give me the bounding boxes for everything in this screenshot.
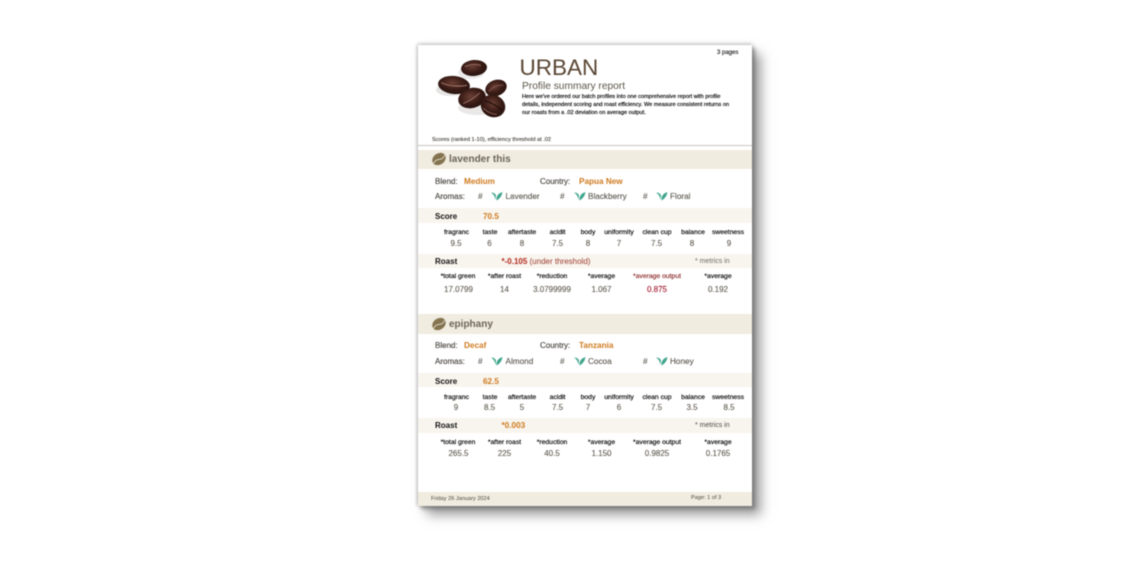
roast band [418,254,752,268]
panel: epiphany: 8.5 [484,402,495,412]
panel: lavender this: 0.192 [708,284,728,294]
panel: lavender this: aftertaste [508,229,536,236]
icon: leaf [490,356,503,366]
panel: lavender this: 8 [690,239,694,248]
aromas: Aromas: [435,357,465,366]
panel: lavender this: 1.067 [591,284,612,294]
panel: lavender this: Score [435,212,457,220]
panel: lavender this: Papua New [579,176,623,186]
panel: epiphany: acidit [550,394,565,400]
panel: epiphany: 3.5 [686,402,698,412]
panel: lavender this: 14 [500,284,509,294]
panel: lavender this: 7.5 [651,239,662,248]
panel: lavender this: 7 [617,239,621,248]
panel: lavender this: Floral [670,192,690,200]
panel: lavender this: Roast [435,256,457,266]
panel: epiphany: 265.5 [448,448,469,458]
date: Friday 26 January 2024 [431,496,490,502]
roast metrics: *total green [441,438,475,446]
score metrics: fragranc [444,394,469,400]
panel: epiphany: Score [435,376,457,386]
intro text [521,93,730,116]
panel: epiphany: taste [483,394,497,400]
panel: lavender this: 17.0799 [444,284,473,294]
scale note: Scores (ranked 1-10), efficiency threshold at .02 [432,137,551,143]
panel: lavender this: * metrics in [695,258,730,264]
panel: epiphany: 6 [617,402,621,412]
panel: epiphany: sweetness [712,394,744,400]
panel: epiphany: 7 [586,402,590,412]
panel: lavender this: body [581,229,595,236]
panel: lavender this: *average [588,273,615,280]
title: URBAN [520,55,598,80]
roast band [418,418,752,433]
intro text: details, independent scoring and roast efficiency. We measure consistent returns on [522,102,729,108]
subtitle: Profile summary report [522,81,625,92]
panel: epiphany: Almond [506,357,533,366]
panel: epiphany: * metrics in [695,422,730,428]
country: Country: [540,177,570,186]
panel: epiphany: *average output [633,438,681,446]
panel: epiphany: body [581,394,595,400]
icon: leaf [490,192,503,201]
panel: lavender this: 3.0799999 [533,284,571,294]
panel: lavender this: *after roast [488,273,521,280]
panel: epiphany: 1.150 [591,448,612,458]
panel: lavender this [418,150,752,294]
panel: lavender this: 8 [586,239,590,248]
score band [418,373,752,387]
panel: epiphany: 7.5 [651,402,662,412]
icon: leaf [574,356,586,366]
roast metrics: *total green [441,273,475,280]
panel: lavender this: 6 [487,239,492,248]
divider [418,145,752,146]
panel: lavender this: *average output [633,273,681,280]
panel: epiphany [418,314,752,458]
panel: epiphany: *average [704,438,732,446]
panel: lavender this: 9 [727,239,731,248]
panel: epiphany: clean cup [642,394,672,400]
panel: lavender this: uniformity [604,229,634,236]
panel: epiphany: 5 [520,402,524,412]
panel: lavender this: 8 [520,239,524,248]
panel: epiphany: 7.5 [552,402,563,412]
panel: epiphany: Tanzania [579,340,613,350]
country: Country: [540,340,570,350]
panel: epiphany: *after roast [488,438,521,446]
panel: epiphany: Honey [670,357,694,366]
intro text: our roasts from a .02 deviation on average output. [522,110,646,116]
panel: epiphany: aftertaste [508,394,536,400]
panel: epiphany: # [643,357,648,366]
panel: epiphany: Cocoa [588,357,612,366]
panel: epiphany: 62.5 [483,376,499,386]
image: coffee beans [436,59,508,118]
panel: epiphany: Decaf [464,340,486,350]
icon: coffee bean [432,152,446,166]
panel: epiphany: *average [588,438,615,446]
panel: lavender this: # [560,192,565,200]
panel: lavender this: acidit [550,229,565,236]
blend: Blend: [435,177,458,186]
panel: epiphany: *reduction [537,438,567,446]
score band [418,208,752,223]
blend: Blend: [435,340,458,350]
section heading: epiphany [449,319,493,330]
panel: lavender this: balance [681,229,705,236]
section band [418,314,752,334]
panel: epiphany: 40.5 [544,448,560,458]
panel: epiphany: 9 [454,402,458,412]
page count: 3 pages [717,50,738,56]
panel: epiphany: uniformity [604,394,634,400]
panel: epiphany: 225 [498,448,511,458]
panel: epiphany: Roast [435,420,457,430]
aromas: Aromas: [435,192,465,201]
page number: Page: 1 of 3 [691,494,721,500]
panel: lavender this: Lavender [506,192,540,200]
roast value: *-0.105 (under threshold) [502,256,590,266]
report page [418,45,752,506]
panel: epiphany: # [560,357,565,366]
panel: lavender this: # [643,192,648,200]
panel: epiphany: balance [681,394,705,400]
panel: epiphany: 0.1765 [706,448,730,458]
panel: lavender this: Blackberry [588,192,627,200]
panel: lavender this: 0.875 [647,284,667,294]
icon: coffee bean [432,317,446,331]
panel: lavender this: *average [704,273,732,280]
panel: epiphany: 8.5 [723,402,735,412]
panel: lavender this: Medium [464,176,495,186]
panel: lavender this: 7.5 [552,239,563,248]
panel: lavender this: 9.5 [450,239,462,248]
section band [418,150,752,169]
panel: lavender this: *reduction [537,273,567,280]
score metrics: fragranc [444,229,469,236]
icon: leaf [574,192,586,201]
panel: lavender this: clean cup [642,229,672,236]
panel: epiphany: 0.9825 [645,448,669,458]
icon: leaf [656,356,668,366]
panel: lavender this: taste [483,229,497,236]
roast value: *0.003 [502,420,525,430]
panel: lavender this: 70.5 [483,212,499,220]
section heading: lavender this [449,154,511,164]
panel: epiphany: # [478,357,483,366]
icon: leaf [656,192,668,201]
panel: lavender this: # [478,192,483,201]
panel: lavender this: sweetness [712,229,744,236]
footer [418,492,752,506]
intro text: Here we've ordered our batch profiles into one comprehensive report with profile [522,94,721,100]
